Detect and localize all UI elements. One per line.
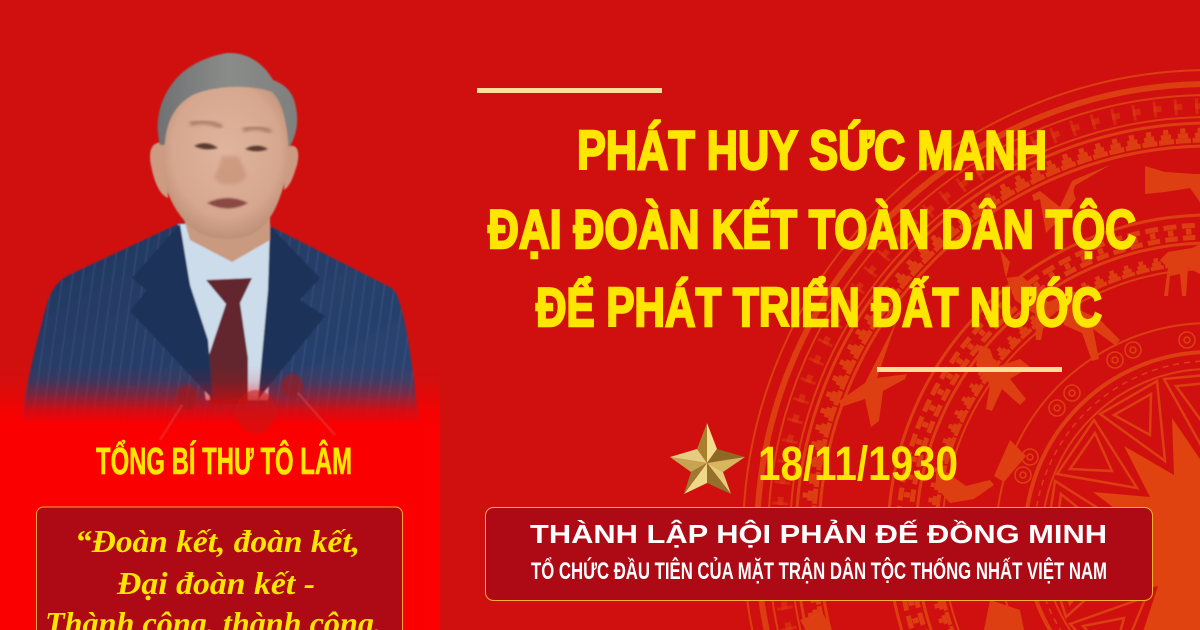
microphones bbox=[160, 374, 335, 440]
top rule bbox=[477, 88, 662, 93]
right ear bbox=[284, 146, 298, 190]
neck bbox=[180, 205, 270, 262]
face bbox=[164, 87, 289, 239]
right brow bbox=[243, 128, 271, 132]
name heading: TỔNG BÍ THƯ TÔ LÂM bbox=[96, 438, 352, 483]
event box bbox=[486, 508, 1152, 600]
quote text bbox=[45, 523, 382, 630]
main title: PHÁT HUY SỨC MẠNH bbox=[577, 119, 1047, 181]
right eye bbox=[245, 146, 268, 152]
quote box bbox=[36, 507, 402, 630]
left brow bbox=[190, 122, 222, 127]
shirt bbox=[178, 224, 272, 400]
left ear bbox=[150, 142, 168, 198]
jacket bbox=[20, 223, 424, 440]
event title: THÀNH LẬP HỘI PHẢN ĐẾ ĐỒNG MINH bbox=[530, 519, 1107, 549]
right lapel bbox=[258, 226, 325, 400]
jacket pinstripes bbox=[20, 223, 424, 440]
main title bbox=[488, 119, 1136, 338]
left eye bbox=[194, 143, 218, 150]
icon: gold star bbox=[670, 423, 745, 494]
emblem: bronze drum pattern bbox=[743, 70, 1200, 630]
left lapel bbox=[130, 224, 213, 400]
hair bbox=[158, 53, 297, 146]
person: portrait of Tô Lâm bbox=[20, 53, 424, 440]
bottom rule bbox=[877, 367, 1062, 372]
tie bbox=[206, 278, 252, 405]
quote text: “Đoàn kết, đoàn kết, bbox=[75, 523, 360, 559]
red fade panel under portrait bbox=[0, 365, 440, 630]
date: 18/11/1930 bbox=[758, 438, 958, 491]
quote text: Đại đoàn kết - bbox=[116, 565, 315, 601]
nose bbox=[214, 156, 247, 184]
mouth bbox=[207, 198, 248, 208]
